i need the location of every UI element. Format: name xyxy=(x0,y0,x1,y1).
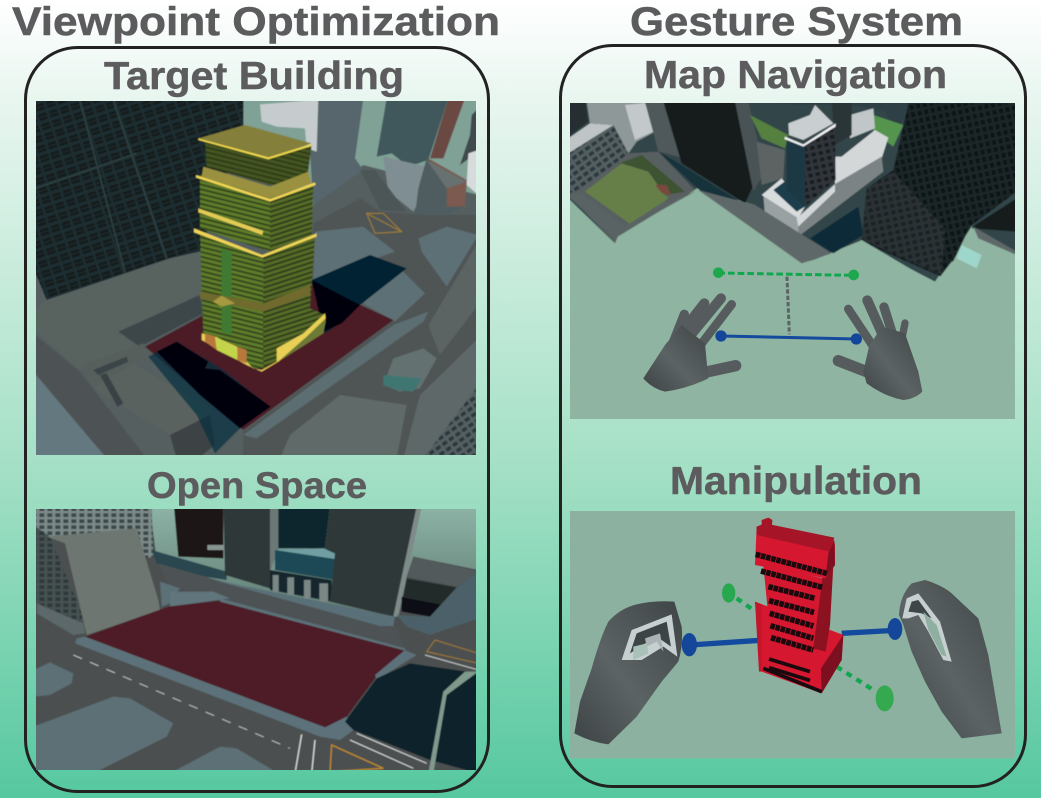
panel: target building scene xyxy=(33,98,480,458)
central tower xyxy=(787,138,805,207)
gesture: green dashed line xyxy=(718,273,854,275)
panel: map navigation scene xyxy=(568,102,1017,422)
panel: viewpoint optimization outline xyxy=(26,48,488,792)
icon: left gripping hand xyxy=(574,601,682,744)
red building model xyxy=(755,518,843,693)
gesture: green dashed axis xyxy=(737,598,873,690)
gesture: grey dotted link xyxy=(787,277,789,334)
heading: Viewpoint Optimization: Viewpoint Optimization xyxy=(12,0,500,44)
sky and distant buildings xyxy=(33,507,478,635)
left rooftop xyxy=(124,270,134,279)
panel: manipulation scene xyxy=(570,511,1015,758)
road markings xyxy=(73,655,290,748)
gesture handles xyxy=(713,267,862,345)
gesture handles xyxy=(682,583,902,711)
target building highlighted xyxy=(194,125,326,372)
gesture: blue connector xyxy=(690,630,895,645)
heading: Target Building: Target Building xyxy=(104,55,404,98)
panel: open space scene xyxy=(33,507,480,773)
icon: left hand xyxy=(643,298,736,392)
left road and low buildings xyxy=(33,333,147,458)
traffic islands xyxy=(33,662,73,697)
pavement behind plot xyxy=(158,563,246,590)
icon: right gripping hand xyxy=(899,580,1002,738)
city ground and buildings xyxy=(568,102,1017,282)
right foreground buildings xyxy=(429,246,476,354)
foreground left buildings xyxy=(36,539,82,622)
dark tower left xyxy=(33,98,243,300)
heading: Gesture System: Gesture System xyxy=(630,0,963,44)
heading: Map Navigation: Map Navigation xyxy=(644,54,947,97)
heading: Open Space: Open Space xyxy=(147,465,367,506)
sky and background towers xyxy=(243,98,478,215)
icon: right hand xyxy=(838,300,922,400)
red open space xyxy=(77,601,405,728)
ground roads xyxy=(243,198,478,458)
right tower xyxy=(862,103,1017,278)
gesture: blue line xyxy=(721,336,856,339)
red open space xyxy=(145,282,393,430)
curb xyxy=(75,637,356,740)
heading: Manipulation: Manipulation xyxy=(670,460,922,503)
low white blocks xyxy=(835,130,888,185)
open floor edge xyxy=(614,202,954,279)
dark plaza lower right xyxy=(345,663,478,773)
panel: gesture system outline xyxy=(560,46,1026,786)
building shadows xyxy=(148,342,270,453)
